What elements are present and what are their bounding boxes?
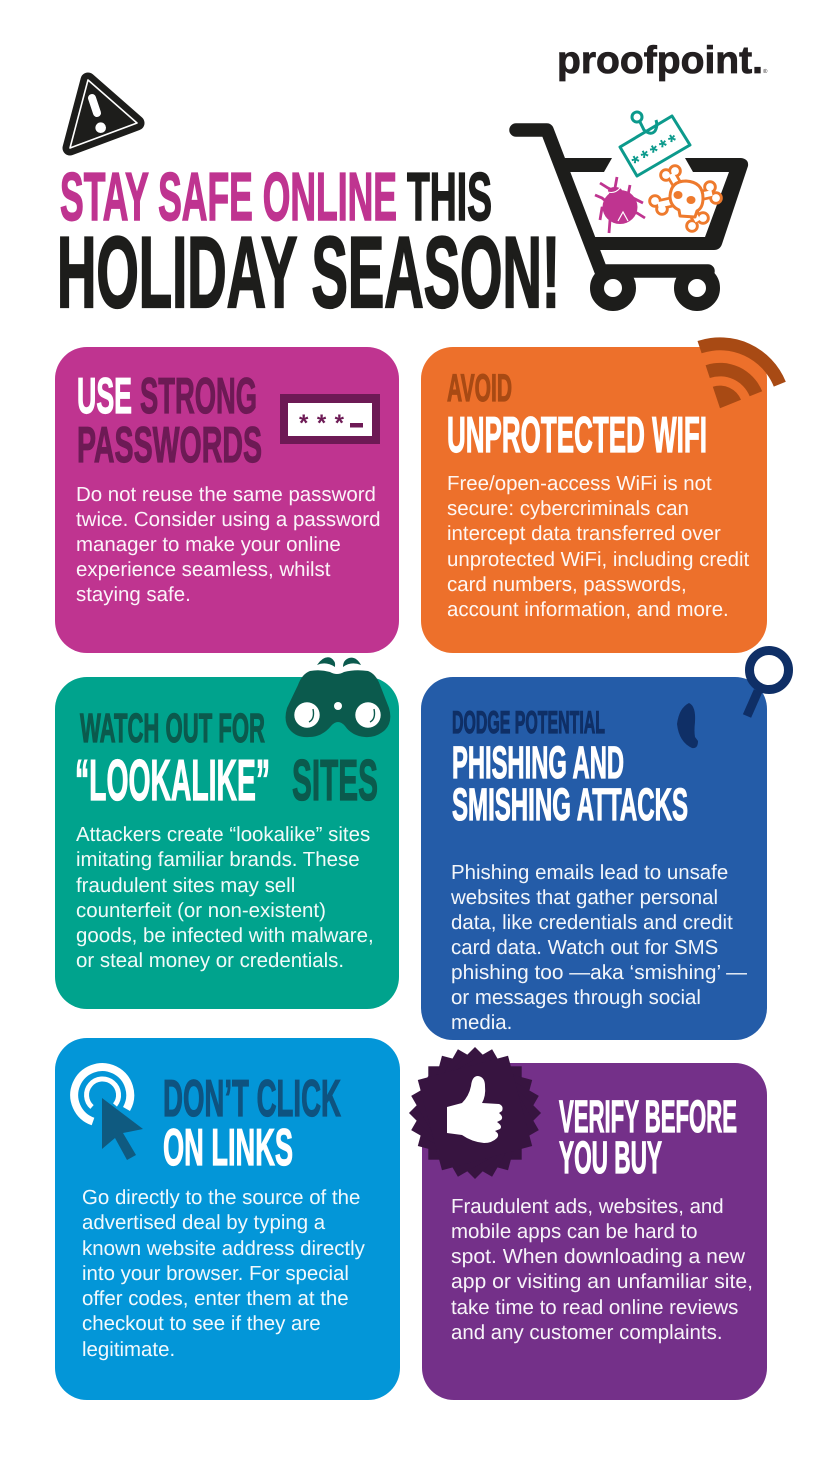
body text: Attackers create “lookalike” sites — [76, 823, 370, 846]
body text — [450, 861, 748, 1034]
icon: click cursor — [74, 1067, 143, 1160]
panel: unprotected wifi — [421, 337, 786, 653]
icon: skull and crossbones — [648, 164, 723, 233]
heading: use strong passwords: STRONG — [140, 367, 257, 424]
heading: avoid unprotected wifi: AVOID — [447, 367, 512, 410]
heading: watch out for lookalike sites: “LOOKALIKE” — [75, 748, 270, 813]
body text: Do not reuse the same password — [76, 483, 376, 506]
icon: phishing password tag: ***** — [628, 130, 683, 174]
body text: or messages through social — [451, 986, 701, 1009]
body text: intercept data transferred over — [447, 522, 721, 545]
body text: phishing too —aka ‘smishing’ — — [451, 961, 748, 984]
heading: don't click on links — [163, 1070, 341, 1177]
heading: dodge potential phishing and smishing attacks: DODGE POTENTIAL — [452, 704, 605, 740]
body text: data, like credentials and credit — [451, 911, 733, 934]
logo: proofpoint: ® — [763, 68, 768, 75]
title — [57, 159, 560, 329]
heading: use strong passwords: PASSWORDS — [77, 416, 262, 473]
heading: dodge potential phishing and smishing attacks — [452, 704, 688, 830]
body text: known website address directly — [82, 1237, 366, 1260]
body text: card numbers, passwords, — [447, 573, 687, 596]
body text — [76, 483, 380, 606]
title: STAY SAFE ONLINE — [60, 159, 397, 235]
panel: phishing and smishing — [421, 650, 788, 1040]
body text: experience seamless, whilst — [76, 558, 331, 581]
body text: offer codes, enter them at the — [82, 1287, 349, 1310]
panel: lookalike sites — [55, 657, 399, 1009]
icon: shopping cart — [516, 112, 748, 304]
heading: use strong passwords: USE — [77, 367, 132, 424]
body text: take time to read online reviews — [451, 1296, 738, 1319]
body text — [451, 1195, 753, 1344]
icon: speech fragment — [677, 703, 698, 748]
icon: phishing password tag — [620, 112, 690, 176]
panel: verify before you buy — [409, 1047, 767, 1400]
heading: watch out for lookalike sites: SITES — [292, 748, 378, 813]
icon: wifi signal — [698, 337, 786, 408]
body text — [82, 1186, 366, 1361]
body text — [447, 472, 749, 621]
body text: and any customer complaints. — [451, 1321, 722, 1344]
body text: card data. Watch out for SMS — [451, 936, 718, 959]
body text: Fraudulent ads, websites, and — [451, 1195, 724, 1218]
body text: goods, be infected with malware, — [76, 924, 374, 947]
icon: bug — [595, 177, 645, 233]
panel: don't click on links — [55, 1038, 400, 1400]
heading: watch out for lookalike sites: WATCH OUT FOR — [80, 705, 265, 751]
body text: checkout to see if they are — [82, 1312, 321, 1335]
body text: mobile apps can be hard to — [451, 1220, 698, 1243]
body text: imitating familiar brands. These — [76, 848, 360, 871]
title: THIS — [407, 159, 492, 235]
heading: verify before you buy — [559, 1091, 737, 1183]
logo: proofpoint: proofpoint. — [557, 39, 763, 82]
body text: into your browser. For special — [82, 1262, 349, 1285]
body text: fraudulent sites may sell — [76, 874, 295, 897]
body text: media. — [451, 1011, 512, 1034]
heading: use strong passwords — [77, 367, 262, 473]
icon: password field — [280, 394, 380, 444]
body text: Free/open-access WiFi is not — [447, 472, 712, 495]
body text: Phishing emails lead to unsafe — [451, 861, 728, 884]
icon: password field: *** — [299, 410, 345, 437]
body text: legitimate. — [82, 1338, 175, 1361]
body text: unprotected WiFi, including credit — [447, 548, 749, 571]
body text: twice. Consider using a password — [76, 508, 380, 531]
body text: counterfeit (or non-existent) — [76, 899, 326, 922]
heading: watch out for lookalike sites — [75, 705, 378, 813]
body text: staying safe. — [76, 583, 191, 606]
body text: websites that gather personal — [450, 886, 718, 909]
body text: Go directly to the source of the — [82, 1186, 360, 1209]
body text: app or visiting an unfamiliar site, — [451, 1270, 753, 1293]
body text: advertised deal by typing a — [82, 1211, 326, 1234]
heading: avoid unprotected wifi — [447, 367, 707, 463]
icon: magnifying glass — [747, 650, 788, 716]
body text: manager to make your online — [76, 533, 341, 556]
body text: spot. When downloading a new — [451, 1245, 745, 1268]
heading: verify before you buy: YOU BUY — [559, 1132, 662, 1183]
body text: or steal money or credentials. — [76, 949, 344, 972]
heading: don't click on links: DON’T CLICK — [163, 1070, 341, 1128]
heading: dodge potential phishing and smishing attacks: PHISHING AND — [452, 737, 624, 788]
body text: account information, and more. — [447, 598, 729, 621]
icon: binoculars — [286, 657, 390, 737]
icon: warning triangle — [70, 80, 137, 148]
heading: don't click on links: ON LINKS — [163, 1119, 293, 1177]
body text: secure: cybercriminals can — [447, 497, 689, 520]
body text — [76, 823, 374, 972]
icon: thumbs up badge — [409, 1047, 541, 1179]
panel: strong passwords — [55, 347, 399, 653]
